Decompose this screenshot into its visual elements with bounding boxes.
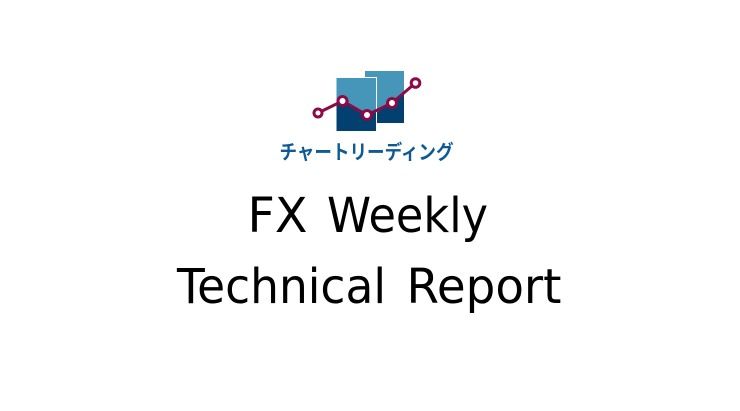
title line 2: Report [406,259,562,315]
title [176,188,562,315]
logo [280,71,454,165]
icon: front document [336,77,377,132]
icon: chart line [314,79,420,120]
icon: back document [365,71,404,123]
title line 2: Technical [176,259,386,315]
title line 1: FX [248,188,308,244]
logo wordmark: チャートリーディング [280,136,454,165]
title line 1: Weekly [327,188,488,244]
